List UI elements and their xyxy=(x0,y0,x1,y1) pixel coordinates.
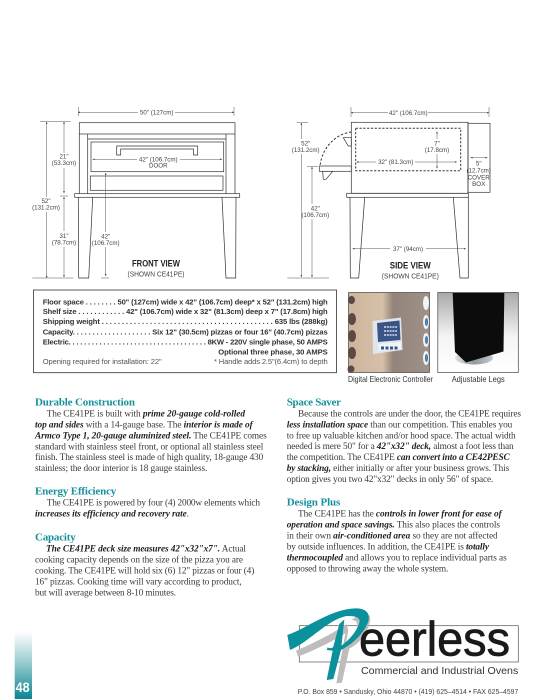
front dimension labels: 42" (106.7cm) xyxy=(139,156,178,163)
text block: durable construction: top and sides with a 14-gauge base. The interior is made of xyxy=(35,421,254,431)
logo tagline: Commercial and Industrial Ovens xyxy=(361,665,518,677)
text block: design plus xyxy=(287,497,507,574)
text block: space saver: by stacking, either initially or after your business grows. This xyxy=(287,463,510,474)
text block: space saver: Space Saver xyxy=(287,397,341,409)
panel: specifications xyxy=(34,290,336,373)
text block: design plus: The CE41PE has the controls in lower front for ease of xyxy=(298,510,503,520)
panel: specifications: Optional three phase, 30 AMPS xyxy=(218,347,328,356)
logo grey shadow P xyxy=(296,613,370,683)
side dimensions xyxy=(287,107,489,278)
text block: capacity: The CE41PE deck size measures 42"x32"x7". Actual xyxy=(46,545,246,555)
panel: specifications: * Handle adds 2.5"(6.4cm) to depth xyxy=(214,357,328,366)
caption: digital electronic controller: Digital Electronic Controller xyxy=(348,375,433,384)
text block: design plus: opposed to throwing away the whole system. xyxy=(287,564,448,574)
footer address: P.O. Box 859 • Sandusky, Ohio 44870 • (419) 625–4514 • FAX 625–4597 xyxy=(298,687,518,696)
front view title: (SHOWN CE41PE) xyxy=(128,270,185,279)
side dimension labels: 52" xyxy=(301,140,310,148)
panel: specifications: Electric. . . . . . . . . . . . . . . . . . . . . . . . . . . . . . . . . . . . 8KW - 220V single phase, 50 AMPS xyxy=(43,337,328,346)
side dimension labels: (12.7cm) xyxy=(466,168,491,175)
text block: durable construction: Armco Type 1, 20-gauge aluminized steel. The CE41PE comes xyxy=(34,432,267,442)
text block: space saver: less installation space than our competition. This enables you xyxy=(287,421,513,431)
text block: capacity: cooking capacity depends on the size of the pizza you are xyxy=(35,555,243,566)
logo teal P stem xyxy=(327,619,344,680)
front dimension labels: 31" xyxy=(59,233,69,240)
caption: adjustable legs: Adjustable Legs xyxy=(452,375,505,384)
logo teal P swoosh and bowl xyxy=(287,608,369,650)
logo wordmark: eerless xyxy=(359,614,510,667)
panel: specifications: Opening required for installation: 22" xyxy=(43,357,162,366)
front dimension labels: DOOR xyxy=(149,162,168,170)
side view title: SIDE VIEW xyxy=(390,260,431,270)
text block: space saver: the competition. The CE41PE can convert into a CE42PESC xyxy=(287,453,510,463)
text block: capacity: Capacity xyxy=(35,531,76,543)
photo: adjustable legs xyxy=(438,292,518,372)
text block: durable construction: finish. The stainless steel is made of high quality, 18-gauge 430 xyxy=(35,452,264,463)
front dimensions xyxy=(32,107,234,278)
front view title: FRONT VIEW xyxy=(132,259,180,269)
side dimension labels: 32" (81.3cm) xyxy=(378,159,413,166)
text block: energy efficiency: The CE41PE is powered by four (4) 2000w elements which xyxy=(47,498,260,509)
text block: space saver xyxy=(287,397,521,485)
text block: durable construction: standard with stainless steel front, or optional all stainless steel xyxy=(35,441,264,452)
side dimension labels: (131.2cm) xyxy=(292,147,320,154)
side dimension labels xyxy=(292,110,491,253)
front dimension labels xyxy=(32,110,178,247)
page number tab xyxy=(15,632,32,699)
front dimension labels: (131.2cm) xyxy=(32,204,60,212)
side dimension labels: 7" xyxy=(434,140,440,148)
front view diagram xyxy=(32,107,240,279)
text block: capacity: 16" pizzas. Cooking time will vary according to product, xyxy=(35,578,242,588)
front dimension labels: 21" xyxy=(59,154,69,160)
text block: space saver: to free up valuable kitchen and/or hood space. The actual width xyxy=(287,430,516,441)
logo: Peerless xyxy=(287,608,518,683)
text block: space saver: Because the controls are under the door, the CE41PE requires xyxy=(298,410,521,420)
side dimension labels: 37" (94cm) xyxy=(393,246,423,253)
panel: specifications: Shipping weight . . . . . . . . . . . . . . . . . . . . . . . . . . . . . . . . . . . . . . . . . . . 635 lbs (288kg) xyxy=(43,317,328,326)
front view title xyxy=(128,259,185,279)
side dimension labels: (17.8cm) xyxy=(425,147,449,154)
text block: design plus: thermocoupled and allows you to replace individual parts as xyxy=(287,554,507,564)
panel: specifications: Floor space . . . . . . . . 50" (127cm) wide x 42" (106.7cm) deep* x 52" (131.2cm) high xyxy=(43,297,328,306)
side dimension labels: 42" (106.7cm) xyxy=(389,110,428,117)
front dimension labels: 52" xyxy=(41,198,51,205)
text block: capacity: but will average between 8-10 minutes. xyxy=(35,588,176,598)
side dimension labels: (106.7cm) xyxy=(301,212,329,219)
text block: design plus: in their own air-conditioned area so they are not affected xyxy=(287,531,498,542)
text block: durable construction xyxy=(34,397,267,474)
text block: space saver: option gives you two 42"x32" decks in only 56" of space. xyxy=(287,474,493,485)
side view diagram xyxy=(287,107,491,280)
text block: capacity: cooking. The CE41PE will hold six (6) 12" pizzas or four (4) xyxy=(35,566,254,577)
text block: design plus: operation and space savings. This also places the controls xyxy=(287,521,500,531)
front dimension labels: (106.7cm) xyxy=(92,240,120,247)
text block: design plus: by outside influences. In addition, the CE41PE is totally xyxy=(287,542,490,552)
text block: durable construction: The CE41PE is built with prime 20-gauge cold-rolled xyxy=(47,410,245,420)
side view title: (SHOWN CE41PE) xyxy=(382,271,439,280)
side dimension labels: BOX xyxy=(472,181,485,188)
panel: specifications: Capacity. . . . . . . . . . . . . . . . . . . . Six 12" (30.5cm) pizzas or four 16" (40.7cm) pizzas xyxy=(43,327,328,336)
front dimension labels: 50" (127cm) xyxy=(140,110,173,116)
text block: energy efficiency: increases its efficiency and recovery rate. xyxy=(35,510,189,520)
text block: design plus: Design Plus xyxy=(287,497,341,509)
oven body side xyxy=(319,122,490,278)
front dimension labels: (53.3cm) xyxy=(52,160,76,167)
page number tab: 48 xyxy=(16,680,30,695)
photo: digital electronic controller xyxy=(348,292,430,372)
side view title xyxy=(382,260,439,280)
panel: specifications: Shelf size . . . . . . . . . . . . 42" (106.7cm) wide x 32" (81.3cm) deep x 7" (17.8cm) high xyxy=(43,307,328,316)
oven body front xyxy=(75,123,240,278)
side dimension labels: COVER xyxy=(468,174,490,182)
side dimension labels: 5" xyxy=(476,161,482,168)
text block: energy efficiency: Energy Efficiency xyxy=(35,486,117,498)
text block: durable construction: Durable Construction xyxy=(35,397,135,409)
text block: space saver: needed is mere 50" for a 42"x32" deck, almost a foot less than xyxy=(287,441,514,452)
text block: capacity xyxy=(35,531,254,598)
text block: durable construction: stainless; the door interior is 18 gauge stainless. xyxy=(35,464,207,474)
front dimension labels: 42" xyxy=(101,234,110,240)
text block: energy efficiency xyxy=(35,486,260,520)
side dimension labels: 42" xyxy=(311,206,320,212)
front dimension labels: (78.7cm) xyxy=(52,240,76,246)
